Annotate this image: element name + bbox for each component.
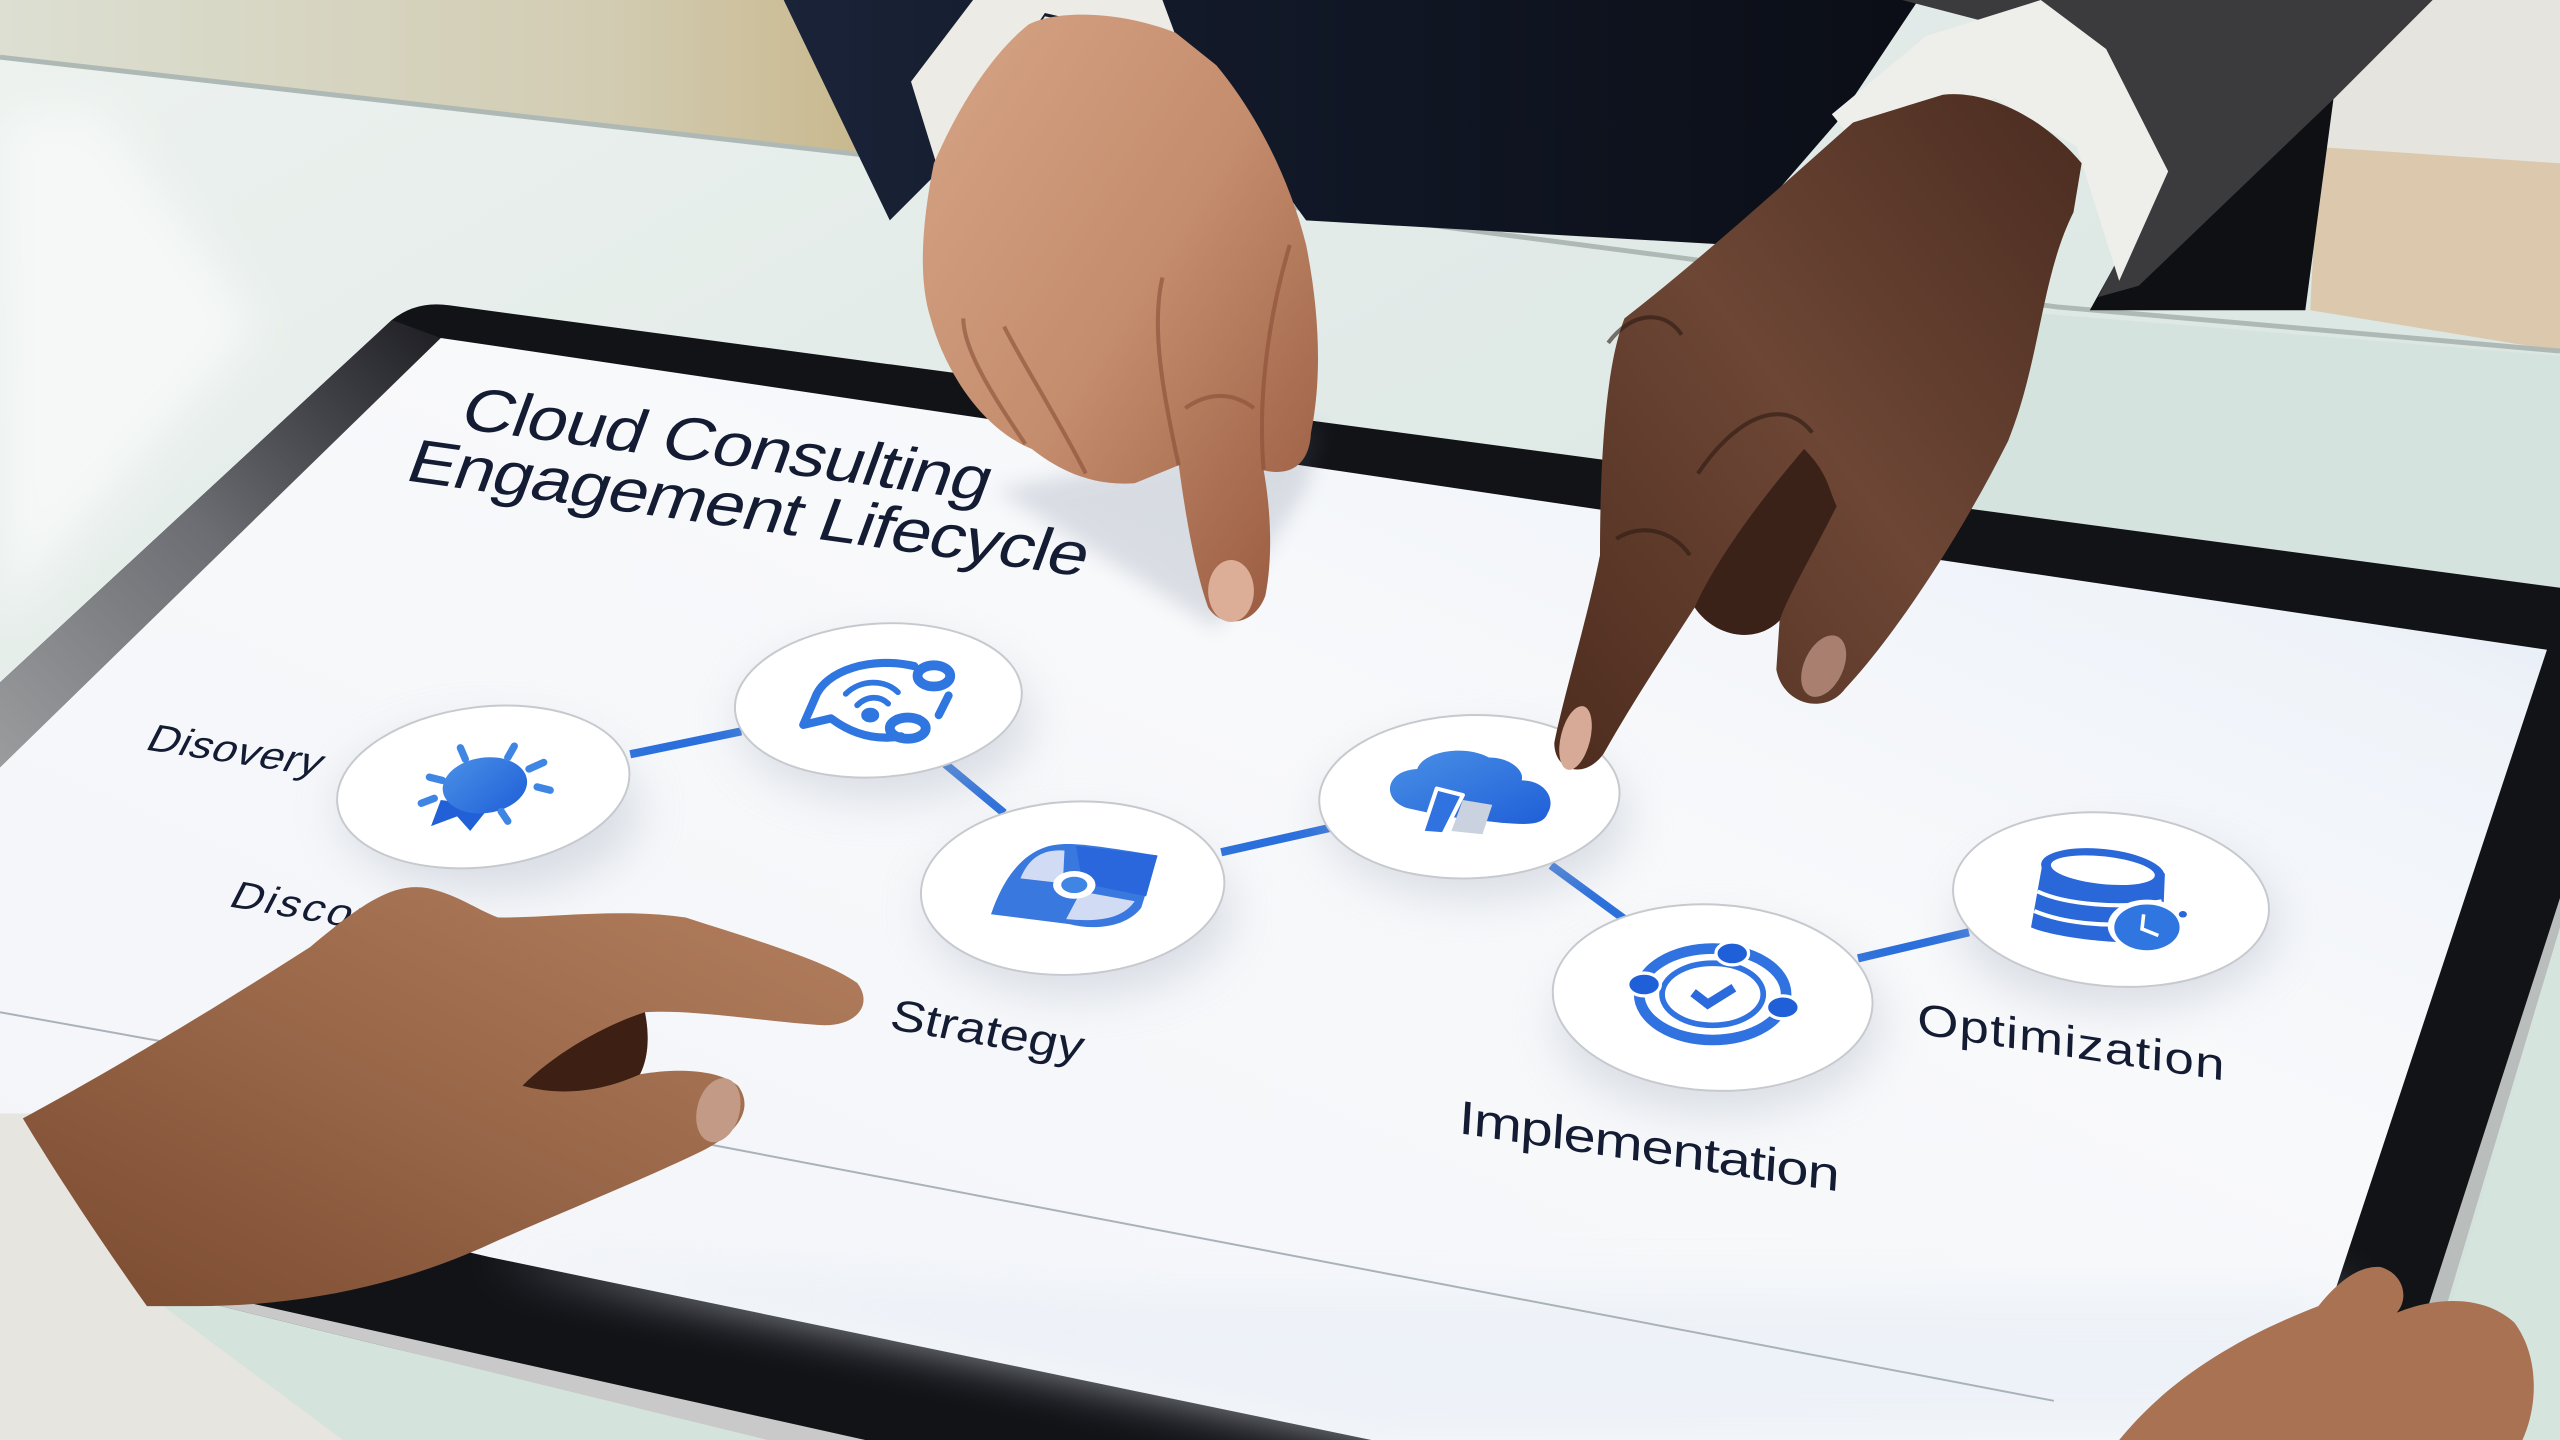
tablet body	[0, 304, 2560, 1440]
tablet bezel	[0, 304, 2560, 1440]
node: discovery	[328, 690, 640, 891]
labels: Disovery	[140, 717, 333, 784]
node: strategy	[916, 794, 1233, 996]
thumb nail	[689, 1073, 747, 1147]
icon: check ring	[1628, 942, 1799, 1040]
node: cloud	[1316, 710, 1629, 900]
labels: Strategy	[886, 990, 1089, 1072]
hand: bottom left pointing	[23, 887, 864, 1306]
icon: sun award	[421, 746, 550, 831]
node: implementation	[1548, 896, 1882, 1113]
background: wall top left	[0, 0, 865, 155]
lifecycle connectors	[630, 731, 1969, 958]
node: optimization	[1946, 800, 2278, 1009]
labels: Implementation	[1457, 1091, 1841, 1202]
panel: screen	[0, 338, 2547, 1440]
screen bottom blue tint	[490, 1257, 2343, 1440]
finger creases	[963, 245, 1290, 473]
background: wood floor top right	[2310, 147, 2560, 351]
fingernail	[1208, 560, 1254, 622]
hand dark knuckle shadow	[1695, 449, 1837, 635]
tablet silver edge bottom	[188, 1295, 865, 1440]
screen divider line	[0, 1012, 2054, 1401]
table corner right of tablet	[2384, 939, 2560, 1440]
hand dark creases	[1608, 317, 1812, 555]
labels	[140, 717, 2225, 1202]
fingernails dark hand	[1553, 703, 1598, 773]
labels: Discov	[223, 874, 388, 939]
hand: bottom right	[2119, 1267, 2534, 1440]
shadow of top hand	[996, 424, 1322, 629]
tablet left bezel highlight	[0, 320, 441, 767]
suit: dark body right	[2090, 90, 2335, 310]
background: table back edge	[0, 57, 2560, 351]
bottom left table area	[0, 1257, 767, 1440]
icon: cloud migration	[1390, 751, 1551, 834]
background: pale wall top right	[2327, 0, 2560, 163]
background: window glare on table	[0, 106, 261, 620]
tablet silver edge right	[2426, 898, 2560, 1319]
node: consultation	[730, 614, 1032, 800]
icon: strategy quadrants	[991, 844, 1158, 927]
icon: database clock	[2031, 843, 2187, 952]
hand: top centre pointing	[923, 15, 1318, 622]
shirt cuff left	[911, 0, 1179, 171]
shirt cuff right	[1832, 0, 2168, 281]
title: Cloud Consulting	[452, 375, 1004, 514]
background: table strip right	[1943, 313, 2560, 596]
title: Engagement Lifecycle	[398, 427, 1101, 590]
icon: chat wifi	[803, 663, 950, 739]
suit: grey sleeve	[1902, 0, 2433, 297]
labels: Optimization	[1916, 995, 2225, 1090]
sleeve: bottom left shirt	[0, 1113, 343, 1440]
suit: navy sleeve and body	[784, 0, 1918, 245]
hand: right dark pointing	[1553, 94, 2082, 773]
hand gap shadow	[522, 1012, 648, 1091]
